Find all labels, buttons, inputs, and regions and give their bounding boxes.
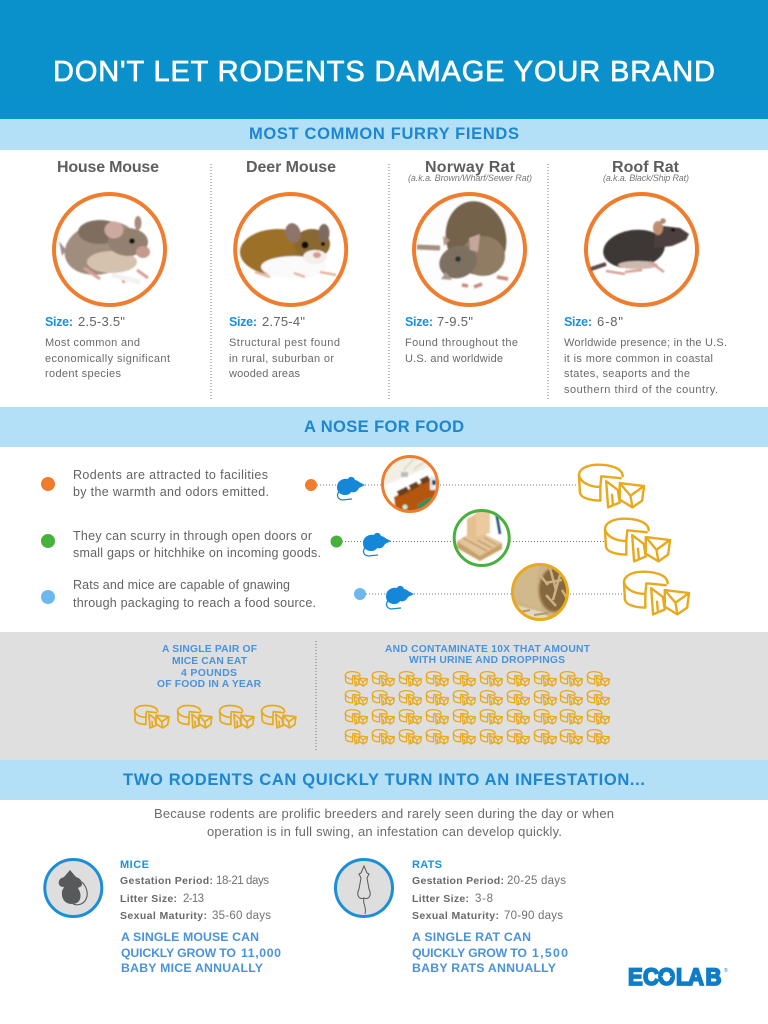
description (405, 337, 518, 365)
heading: mice: MICE (120, 859, 149, 871)
text: single pair: MICE CAN EAT (172, 656, 248, 667)
panel: deer mouse (228, 159, 346, 380)
stats: mice: 2-13 (183, 893, 204, 905)
stats: rats: 70-90 days (504, 910, 563, 922)
text: single pair: OF FOOD IN A YEAR (157, 679, 262, 690)
callout: rats: 1,500 (532, 946, 568, 960)
bullet row 2 (41, 529, 321, 560)
description (45, 337, 170, 380)
description: southern third of the country. (564, 384, 718, 396)
stats: mice: Sexual Maturity: (120, 910, 207, 922)
stats: mice: Gestation Period: (120, 875, 213, 887)
icon: mouse silhouette (45, 860, 102, 916)
description: it is more common in coastal (564, 353, 713, 365)
text: gnawing: Rats and mice are capable of gnawing (73, 578, 290, 592)
icons: forty cheese (345, 672, 609, 744)
icon: cheese (579, 465, 644, 507)
section band: nose for food (0, 407, 768, 447)
intro text (154, 806, 614, 839)
scene: gnawed packaging (510, 564, 569, 622)
dot (330, 536, 342, 548)
stats: mice (120, 875, 271, 922)
text: gnawing (73, 578, 316, 610)
heading: furry fiends: MOST COMMON FURRY FIENDS (249, 125, 519, 143)
path row 3: mouse to cheese (354, 564, 689, 622)
text: contaminate (385, 644, 591, 666)
text: single pair: 4 POUNDS (181, 667, 237, 679)
stats: rats: Sexual Maturity: (412, 910, 499, 922)
path row 1: mouse to cheese (305, 455, 644, 515)
heading: infestation: TWO RODENTS CAN QUICKLY TURN INTO AN INFESTATION... (123, 771, 645, 789)
icon: cheese (605, 519, 670, 561)
panel: food consumption (0, 632, 768, 760)
title: DON'T LET RODENTS DAMAGE YOUR BRAND (53, 56, 715, 88)
stats: mice: 18-21 days (216, 875, 269, 887)
icon: mouse (386, 586, 414, 609)
section band: furry fiends (0, 119, 768, 150)
photo: deer mouse (235, 194, 346, 305)
intro text: operation is in full swing, an infestation can develop quickly. (207, 824, 562, 839)
text: single pair (157, 644, 262, 690)
description (564, 337, 727, 396)
icon: mouse (337, 477, 365, 500)
callout: rats (412, 930, 568, 975)
bullet: light blue (41, 590, 55, 604)
name: House Mouse (57, 159, 159, 176)
icon: mouse (363, 533, 391, 556)
bullet row 3 (41, 578, 316, 610)
callout: mice: QUICKLY GROW TO (121, 946, 236, 960)
text: warmth and odors (73, 468, 269, 499)
panel: roof rat: 6-8" (597, 314, 623, 329)
stats: mice: 35-60 days (212, 910, 271, 922)
alias: (a.k.a. Brown/Wharf/Sewer Rat) (408, 173, 532, 183)
stats: rats (412, 875, 566, 922)
callout: mice (121, 930, 281, 975)
path row 2: mouse to cheese (330, 503, 670, 566)
intro text: Because rodents are prolific breeders and rarely seen during the day or when (154, 806, 614, 821)
alias: (a.k.a. Black/Ship Rat) (603, 173, 689, 183)
panel: rats (336, 859, 568, 975)
text: open doors: They can scurry in through open doors or (73, 529, 312, 543)
panel: norway rat (405, 159, 532, 365)
icons: four cheese (135, 706, 296, 728)
description: Worldwide presence; in the U.S. (564, 337, 727, 349)
description: Structural pest found (229, 337, 340, 349)
callout: rats: BABY RATS ANNUALLY (412, 961, 556, 975)
name: Norway Rat (425, 159, 516, 176)
size: Size: (45, 315, 73, 329)
photo: roof rat (586, 194, 697, 305)
text: warmth and odors: by the warmth and odors emitted. (73, 485, 269, 499)
stats: rats: 3-8 (475, 893, 493, 905)
bullet row 1 (41, 468, 269, 499)
stats: mice: Litter Size: (120, 893, 177, 905)
header band (0, 0, 768, 119)
size: Size: (564, 315, 592, 329)
panel: house mouse (45, 159, 170, 380)
scene: facility (380, 455, 440, 515)
description: states, seaports and the (564, 368, 690, 380)
stats: rats: Litter Size: (412, 893, 469, 905)
callout: mice: A SINGLE MOUSE CAN (121, 930, 259, 944)
bullet: orange (41, 477, 55, 491)
description: wooded areas (228, 368, 300, 380)
section band: infestation (0, 760, 768, 800)
description: rodent species (45, 368, 122, 380)
logo: ecolab: ® (724, 967, 728, 974)
dot (354, 588, 366, 600)
icon: cheese (624, 572, 689, 614)
panel: house mouse: 2.5-3.5" (78, 314, 125, 329)
callout: rats: A SINGLE RAT CAN (412, 930, 531, 944)
description (228, 337, 340, 380)
icon: rat outline (336, 860, 392, 916)
heading: nose for food: A NOSE FOR FOOD (304, 418, 464, 436)
panel: mice (45, 859, 281, 975)
dot (305, 479, 317, 491)
name: Roof Rat (612, 159, 680, 176)
photo: norway rat (414, 194, 525, 305)
text: warmth and odors: Rodents are attracted to facilities (73, 468, 268, 482)
callout: mice: 11,000 (241, 946, 281, 960)
description: in rural, suburban or (229, 353, 334, 365)
stats: rats: Gestation Period: (412, 875, 504, 887)
description: Most common and (45, 337, 140, 349)
text: gnawing: through packaging to reach a food source. (73, 596, 316, 610)
logo: ecolab: ECOLAB (628, 963, 721, 990)
description: U.S. and worldwide (405, 353, 503, 365)
panel: roof rat (564, 159, 727, 396)
panel: norway rat: 7-9.5" (437, 314, 473, 329)
callout: mice: BABY MICE ANNUALLY (121, 961, 263, 975)
text: contaminate: WITH URINE AND DROPPINGS (409, 655, 565, 666)
size: Size: (405, 315, 433, 329)
name: Deer Mouse (246, 159, 336, 176)
photo: house mouse (54, 194, 165, 305)
stats: rats: 20-25 days (507, 875, 566, 887)
description: economically significant (45, 353, 170, 365)
panel: deer mouse: 2.75-4" (262, 314, 305, 329)
scene: pallet (454, 503, 513, 566)
heading: rats: RATS (412, 859, 442, 871)
callout: rats: QUICKLY GROW TO (412, 946, 527, 960)
text: contaminate: AND CONTAMINATE 10X THAT AMOUNT (385, 644, 591, 655)
bullet: green (41, 534, 55, 548)
text: single pair: A SINGLE PAIR OF (162, 644, 257, 655)
size: Size: (229, 315, 257, 329)
text: open doors (73, 529, 321, 560)
text: open doors: small gaps or hitchhike on incoming goods. (73, 546, 321, 560)
description: Found throughout the (405, 337, 518, 349)
